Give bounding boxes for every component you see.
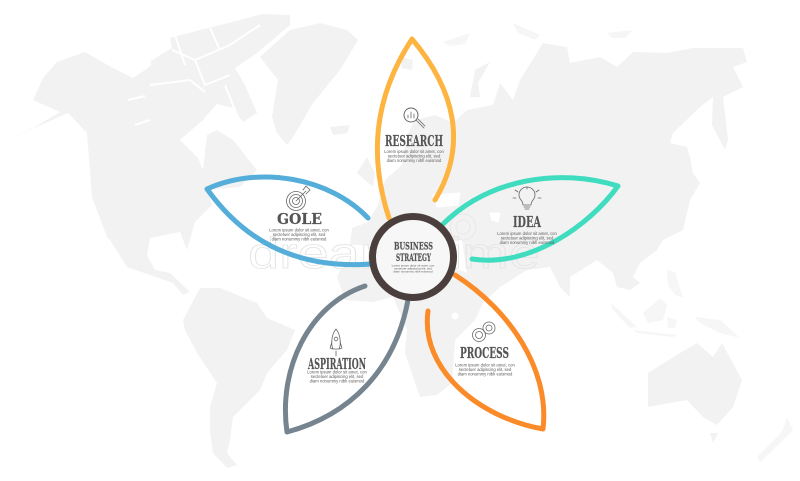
map inland seas and arctic channels — [128, 25, 500, 319]
body text: research — [384, 149, 444, 163]
heading: idea: IDEA — [513, 213, 541, 231]
body text: research: Lorem ipsum dolor sit amet, con — [384, 149, 444, 154]
petal outline: gole — [207, 177, 372, 265]
petal outline: idea — [443, 178, 618, 260]
body text: centre: diam nonummy nibh euismod — [393, 270, 433, 274]
body text: process: Lorem ipsum dolor sit amet, con — [455, 362, 515, 368]
body text: process: diam nonummy nibh euismod — [458, 372, 513, 376]
body text: aspiration: sectetuer adipiscing elit, sed — [311, 374, 364, 379]
body text: aspiration: Lorem ipsum dolor sit amet, con — [307, 370, 367, 374]
faint map islands — [443, 23, 793, 462]
panel: process petal — [427, 275, 544, 429]
body text: idea: sectetuer adipiscing elit, sed — [501, 236, 554, 240]
body text: centre — [392, 264, 435, 274]
heading: business strategy: STRATEGY — [396, 253, 431, 264]
body text: process: sectetuer adipiscing elit, sed — [459, 367, 512, 372]
heading: aspiration: ASPIRATION — [307, 355, 366, 373]
heading: process: PROCESS — [460, 344, 509, 362]
heading: business strategy — [394, 242, 433, 264]
petal outline: process — [427, 275, 544, 429]
body text: centre: Lorem ipsum dolor sit amet, con — [392, 264, 435, 268]
australia — [648, 343, 742, 443]
panel: gole petal — [207, 177, 372, 265]
body text: gole — [269, 228, 329, 242]
body text: idea: diam nonummy nibh euismod — [500, 240, 555, 245]
body text: research: sectetuer adipiscing elit, sed — [388, 154, 441, 158]
body text: idea — [497, 231, 557, 245]
body text: aspiration — [307, 370, 367, 384]
icon: light bulb — [513, 187, 541, 209]
icon: gears — [472, 322, 495, 342]
body text: gole: sectetuer adipiscing elit, sed — [273, 232, 326, 237]
body text: gole: Lorem ipsum dolor sit amet, con — [269, 228, 329, 232]
heading: gole: GOLE — [277, 210, 322, 228]
panel: idea petal — [443, 178, 618, 260]
panel: aspiration petal — [285, 286, 408, 432]
body text: gole: diam nonummy nibh euismod — [272, 236, 327, 242]
icon: rocket — [330, 329, 342, 356]
heading: business strategy: BUSINESS — [394, 242, 433, 252]
centre ring — [372, 216, 454, 298]
watermark: dreamstime — [248, 229, 540, 278]
heading: research: RESEARCH — [385, 132, 443, 150]
body text: process — [455, 362, 515, 376]
body text: aspiration: diam nonummy nibh euismod — [310, 378, 365, 384]
icon: magnifier — [404, 108, 425, 128]
icon: target — [286, 186, 310, 210]
panel: central circle — [372, 216, 454, 298]
panel: research petal — [377, 39, 454, 218]
petal outline: aspiration — [285, 286, 408, 432]
body text: idea: Lorem ipsum dolor sit amet, con — [497, 231, 557, 236]
watermark — [248, 214, 540, 278]
body text: centre: sectetuer adipiscing elit, sed — [394, 266, 432, 270]
body text: research: diam nonummy nibh euismod — [387, 158, 442, 163]
petal outline: research — [377, 39, 454, 218]
